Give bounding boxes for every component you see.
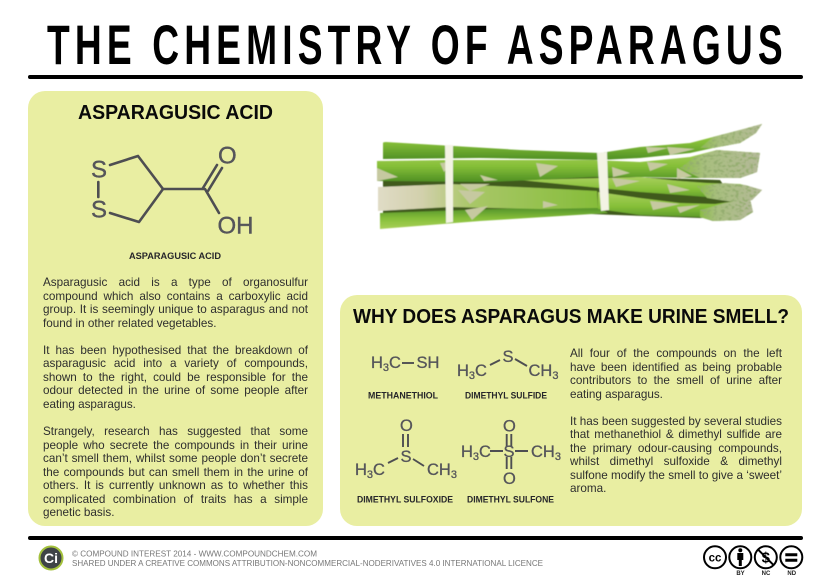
text block: asparagusic acid description: Strangely, research has suggested that some <box>43 425 308 438</box>
spear: lower <box>598 192 753 221</box>
chart: asparagusic acid structure: S <box>91 156 107 184</box>
text block: compound explanation: contributors to the smell of urine after <box>570 374 782 387</box>
text block: compound explanation: aroma. <box>570 482 606 495</box>
text block: compound explanation: that methanethiol & dimethyl sulfide are <box>570 428 782 441</box>
icon: creative commons badges: BY <box>736 571 745 577</box>
chart: dimethyl sulfide: S <box>502 348 514 366</box>
scales on stalks <box>377 147 700 220</box>
title: THE CHEMISTRY OF ASPARAGUS <box>47 15 783 77</box>
icon: compound interest logo <box>38 546 64 570</box>
text block: compound explanation: the primary odour-causing compounds, <box>570 442 782 455</box>
chart: methanethiol: C <box>389 354 401 372</box>
chart: asparagusic acid structure: OH <box>218 212 254 240</box>
chart: dimethyl sulfide <box>457 348 558 400</box>
chart: dimethyl sulfone: H <box>461 443 473 461</box>
chart: asparagusic acid structure: O <box>218 142 237 170</box>
chart: dimethyl sulfone: C <box>479 443 491 461</box>
text block: compound explanation: whilst dimethyl sulfoxide & dimethyl <box>570 455 782 468</box>
text block: asparagusic acid description: can’t smell them, whilst some people don’t secrete <box>43 452 308 465</box>
spear: bottom <box>380 208 608 229</box>
chart: dimethyl sulfoxide: C <box>373 461 385 479</box>
text block: asparagusic acid description: the compounds but can smell them in the urine of <box>43 466 308 479</box>
chart: dimethyl sulfide: C <box>475 362 487 380</box>
text block: asparagusic acid description: group. It is seemingly unique to asparagus and not <box>43 303 308 316</box>
text block: asparagusic acid description: others. It is currently unknown as to whether this <box>43 479 308 492</box>
footer credits: © COMPOUND INTEREST 2014 - WWW.COMPOUNDCHEM.COM <box>72 550 317 558</box>
rubber band: left <box>445 145 453 223</box>
text block: asparagusic acid description: people who secrete the compounds in their urine <box>43 439 308 452</box>
heading: asparagusic acid: ASPARAGUSIC ACID <box>78 102 273 124</box>
chart: methanethiol <box>368 354 439 400</box>
spear: third <box>520 177 762 202</box>
text block: asparagusic acid description: Asparagusic acid is a type of organosulfur <box>43 276 308 289</box>
text block: asparagusic acid description: complicated combination of traits has a simple <box>43 493 308 506</box>
chart: dimethyl sulfoxide <box>355 417 457 504</box>
chart: dimethyl sulfoxide: DIMETHYL SULFOXIDE <box>357 494 453 504</box>
chart: asparagusic acid structure: ASPARAGUSIC ACID <box>129 251 221 261</box>
chart: dimethyl sulfoxide: H <box>355 461 367 479</box>
chart: dimethyl sulfone <box>461 418 561 504</box>
chart: dimethyl sulfide: H <box>457 362 469 380</box>
text block: compound explanation: have been identified as being probable <box>570 361 782 374</box>
dark gaps between spears <box>383 176 745 218</box>
chart: asparagusic acid structure <box>91 142 254 261</box>
text block: asparagusic acid description: It has been hypothesised that the breakdown of <box>43 344 308 357</box>
text block: asparagusic acid description: eating asparagus. <box>43 398 136 411</box>
text block: asparagusic acid description: shown to the right, could be responsible for the <box>43 371 308 384</box>
text block: compound explanation <box>570 347 782 495</box>
spear: upper <box>377 150 760 182</box>
chart: dimethyl sulfide: DIMETHYL SULFIDE <box>465 390 547 400</box>
footer credits: SHARED UNDER A CREATIVE COMMONS ATTRIBUTION-NONCOMMERCIAL-NODERIVATIVES 4.0 INTERNATIONAL LICENCE <box>72 559 543 568</box>
chart: methanethiol: 3 <box>383 362 389 374</box>
chart: dimethyl sulfone: DIMETHYL SULFONE <box>467 494 554 504</box>
icon: creative commons badges: cc <box>709 552 722 564</box>
chart: dimethyl sulfoxide: O <box>400 417 413 435</box>
rubber band: right <box>597 152 609 211</box>
icon: creative commons badges: NC <box>762 571 771 577</box>
text block: asparagusic acid description: found in other related vegetables. <box>43 317 216 330</box>
chart: asparagusic acid structure: S <box>91 196 107 224</box>
chart: methanethiol: SH <box>416 354 439 372</box>
chart: dimethyl sulfone: O <box>503 470 516 488</box>
text block: compound explanation: It has been suggested by several studies <box>570 415 782 428</box>
spear: pale lower stalk <box>378 184 598 211</box>
chart: dimethyl sulfone: 3 <box>473 451 479 463</box>
spear: top <box>383 124 762 160</box>
text block: asparagusic acid description: genetic basis. <box>43 506 114 519</box>
chart: dimethyl sulfoxide: CH <box>427 461 451 479</box>
panel: asparagusic acid <box>28 91 323 526</box>
text block: asparagusic acid description: compound which also contains a carboxylic acid <box>43 290 308 303</box>
chart: dimethyl sulfide: 3 <box>552 370 558 382</box>
chart: dimethyl sulfoxide: S <box>400 448 412 466</box>
text block: compound explanation: All four of the compounds on the left <box>570 347 782 360</box>
chart: dimethyl sulfoxide: 3 <box>367 469 373 481</box>
icon: creative commons badges <box>703 545 804 577</box>
footer rule <box>28 536 803 540</box>
icon: compound interest logo: Ci <box>44 550 58 566</box>
photo: asparagus bunch <box>376 124 762 230</box>
text block: compound explanation: eating asparagus. <box>570 388 663 401</box>
chart: dimethyl sulfoxide: 3 <box>451 469 457 481</box>
asparagus tips <box>680 124 762 221</box>
chart: dimethyl sulfide: CH <box>528 362 552 380</box>
text block: compound explanation: sulfone modify the smell to give a ‘sweet’ <box>570 469 782 482</box>
chart: methanethiol: H <box>371 354 383 372</box>
chart: dimethyl sulfone: CH <box>531 443 555 461</box>
text block: asparagusic acid description: odour detected in the urine of some people after <box>43 384 308 397</box>
icon: creative commons badges: ND <box>787 571 797 577</box>
footer credits <box>72 550 543 568</box>
icon: creative commons badges: $ <box>762 549 771 566</box>
heading: why does asparagus make urine smell: WHY DOES ASPARAGUS MAKE URINE SMELL? <box>353 306 789 328</box>
chart: methanethiol: METHANETHIOL <box>368 390 438 400</box>
chart: dimethyl sulfone: S <box>504 443 515 461</box>
chart: dimethyl sulfide: 3 <box>469 370 475 382</box>
header rule <box>28 75 803 79</box>
chart: dimethyl sulfone: O <box>503 418 516 436</box>
panel: why does asparagus make urine smell <box>340 295 802 526</box>
text block: asparagusic acid description <box>43 276 308 519</box>
text block: asparagusic acid description: asparagusic acid into a variety of compounds, <box>43 357 308 370</box>
chart: dimethyl sulfone: 3 <box>555 451 561 463</box>
